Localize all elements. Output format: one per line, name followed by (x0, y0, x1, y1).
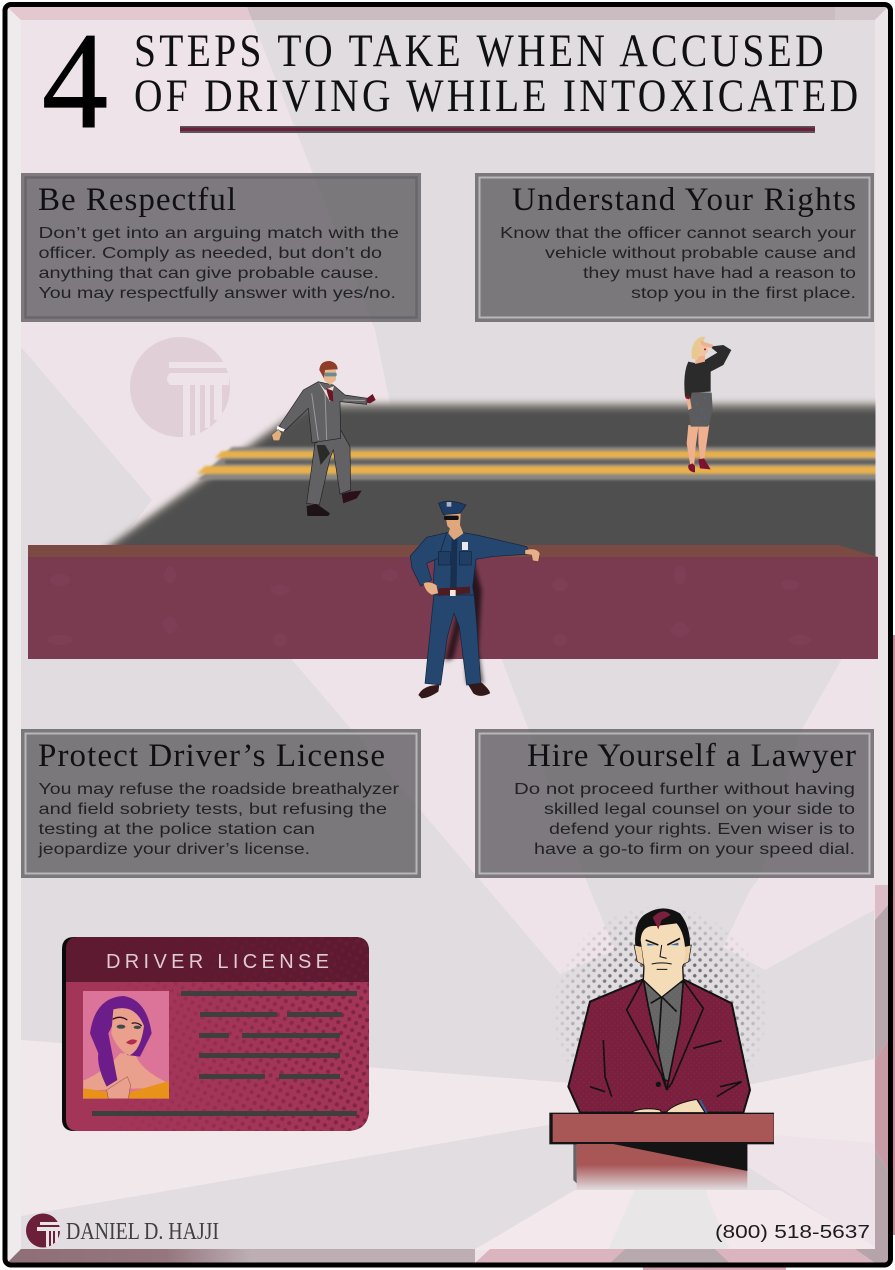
curb (28, 545, 878, 557)
id photo (83, 991, 169, 1099)
body: protect driver's license: You may refuse the roadside breathalyzer (38, 781, 400, 798)
panel: be respectful (21, 173, 421, 322)
body: understand your rights: vehicle without probable cause and (545, 245, 856, 262)
panel: hire yourself a lawyer (475, 729, 874, 878)
figure: woman holding her head (684, 337, 731, 472)
panel: understand your rights (475, 173, 874, 322)
heading: be respectful: Be Respectful (38, 182, 236, 218)
heading: hire yourself a lawyer: Hire Yourself a Lawyer (527, 738, 856, 774)
logo mark (26, 1214, 60, 1248)
body: be respectful: anything that can give probable cause. (38, 265, 379, 282)
body: hire yourself a lawyer (514, 781, 855, 858)
heading: understand your rights: Understand Your Rights (512, 182, 856, 218)
title line one: STEPS TO TAKE WHEN ACCUSED (134, 25, 824, 77)
podium base (577, 1144, 747, 1190)
body: understand your rights: they must have had a reason to (583, 265, 856, 282)
watermark logo (130, 337, 235, 437)
halftone halo (556, 910, 764, 1067)
body: hire yourself a lawyer: skilled legal counsel on your side to (544, 801, 855, 818)
body: understand your rights: Know that the officer cannot search your (500, 225, 857, 242)
phone number: (800) 518-5637 (715, 1222, 870, 1242)
figure: police officer (410, 501, 540, 698)
body: protect driver's license (37, 781, 400, 858)
title (42, 4, 858, 157)
body: be respectful: officer. Comply as needed, but don’t do (38, 245, 382, 262)
redacted text lines (92, 991, 357, 1116)
officer shadow (445, 553, 483, 683)
title numeral: 4 (42, 4, 108, 157)
body: be respectful: Don’t get into an arguing match with the (38, 225, 399, 242)
offcut slivers outside frame (643, 635, 895, 1270)
driver license card (60, 935, 375, 1135)
body: hire yourself a lawyer: Do not proceed further without having (514, 781, 855, 798)
podium top (549, 1113, 774, 1144)
road scene (28, 403, 890, 659)
body: protect driver's license: testing at the police station can (38, 821, 315, 838)
body: hire yourself a lawyer: have a go-to firm on your speed dial. (534, 841, 855, 858)
heading: protect driver's license: Protect Driver’s License (38, 738, 385, 774)
body: hire yourself a lawyer: defend your rights. Even wiser is to (549, 821, 855, 838)
figure: walking man in suit (272, 361, 376, 516)
maroon wall (28, 557, 878, 659)
body: protect driver's license: and field sobriety tests, but refusing the (38, 801, 387, 818)
footer logo (26, 1214, 219, 1248)
lawyer at podium (549, 908, 774, 1190)
road surface (102, 398, 876, 556)
body: understand your rights: stop you in the first place. (631, 285, 856, 302)
body: protect driver's license: jeopardize your driver’s license. (37, 841, 310, 858)
card heading: DRIVER LICENSE (106, 951, 329, 973)
panel: protect driver's license (21, 729, 421, 878)
title underline (180, 126, 815, 133)
body: be respectful: You may respectfully answer with yes/no. (38, 285, 396, 302)
title line two: OF DRIVING WHILE INTOXICATED (134, 70, 858, 122)
body: understand your rights (500, 225, 857, 302)
body: be respectful (38, 225, 399, 302)
firm name: DANIEL D. HAJJI (66, 1219, 219, 1245)
